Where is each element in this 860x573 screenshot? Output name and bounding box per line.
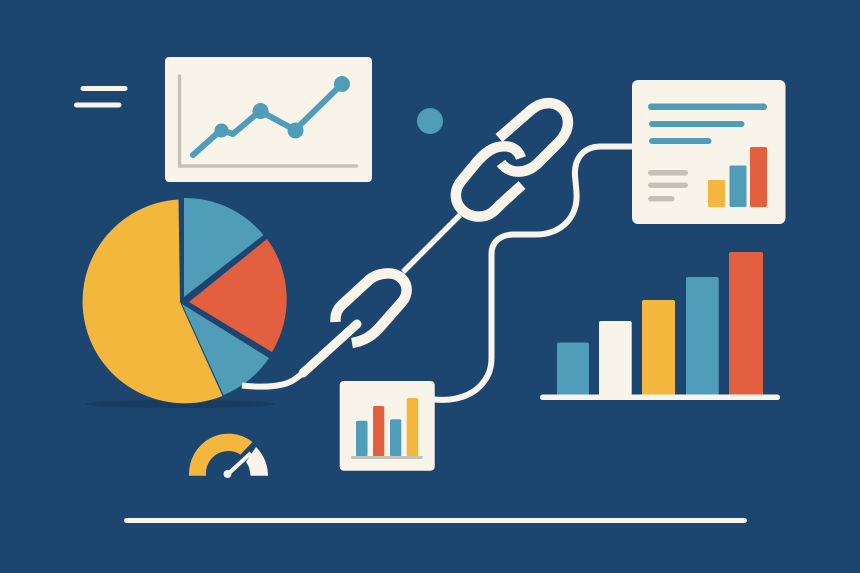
connector: right wire from small card to report card <box>434 146 633 400</box>
decorative dot <box>417 108 443 134</box>
gauge arc: yellow <box>189 434 252 476</box>
mini bar chart <box>708 147 767 207</box>
text lines: grey <box>648 170 688 202</box>
chain: middle link <box>456 146 522 217</box>
panel: report card <box>632 80 786 224</box>
bar chart: large <box>540 252 780 400</box>
text lines: teal <box>648 104 767 144</box>
gauge needle <box>224 453 251 478</box>
chain: lower link <box>335 273 407 343</box>
baseline rule <box>124 518 747 523</box>
bars <box>356 398 418 457</box>
slice: lower blue <box>182 304 269 395</box>
baseline <box>351 456 423 459</box>
slice: red <box>189 239 287 352</box>
chain: upper link <box>499 103 568 172</box>
chart baseline <box>540 394 780 400</box>
pie chart <box>83 198 287 403</box>
slice: yellow <box>83 200 223 403</box>
chain end stroke <box>303 324 357 373</box>
line series with markers <box>193 76 350 155</box>
slice: top blue <box>184 198 264 297</box>
pie shadow <box>84 400 276 408</box>
decorative dashes: top left <box>76 88 125 105</box>
connector: pie to chain <box>242 371 305 387</box>
panel: small bar chart card <box>340 381 435 471</box>
chain: connecting rod <box>403 215 460 272</box>
panel: line chart card <box>165 57 372 182</box>
gauge arc: white <box>246 447 268 476</box>
chart axes <box>180 76 356 166</box>
icon: gauge <box>189 434 268 478</box>
